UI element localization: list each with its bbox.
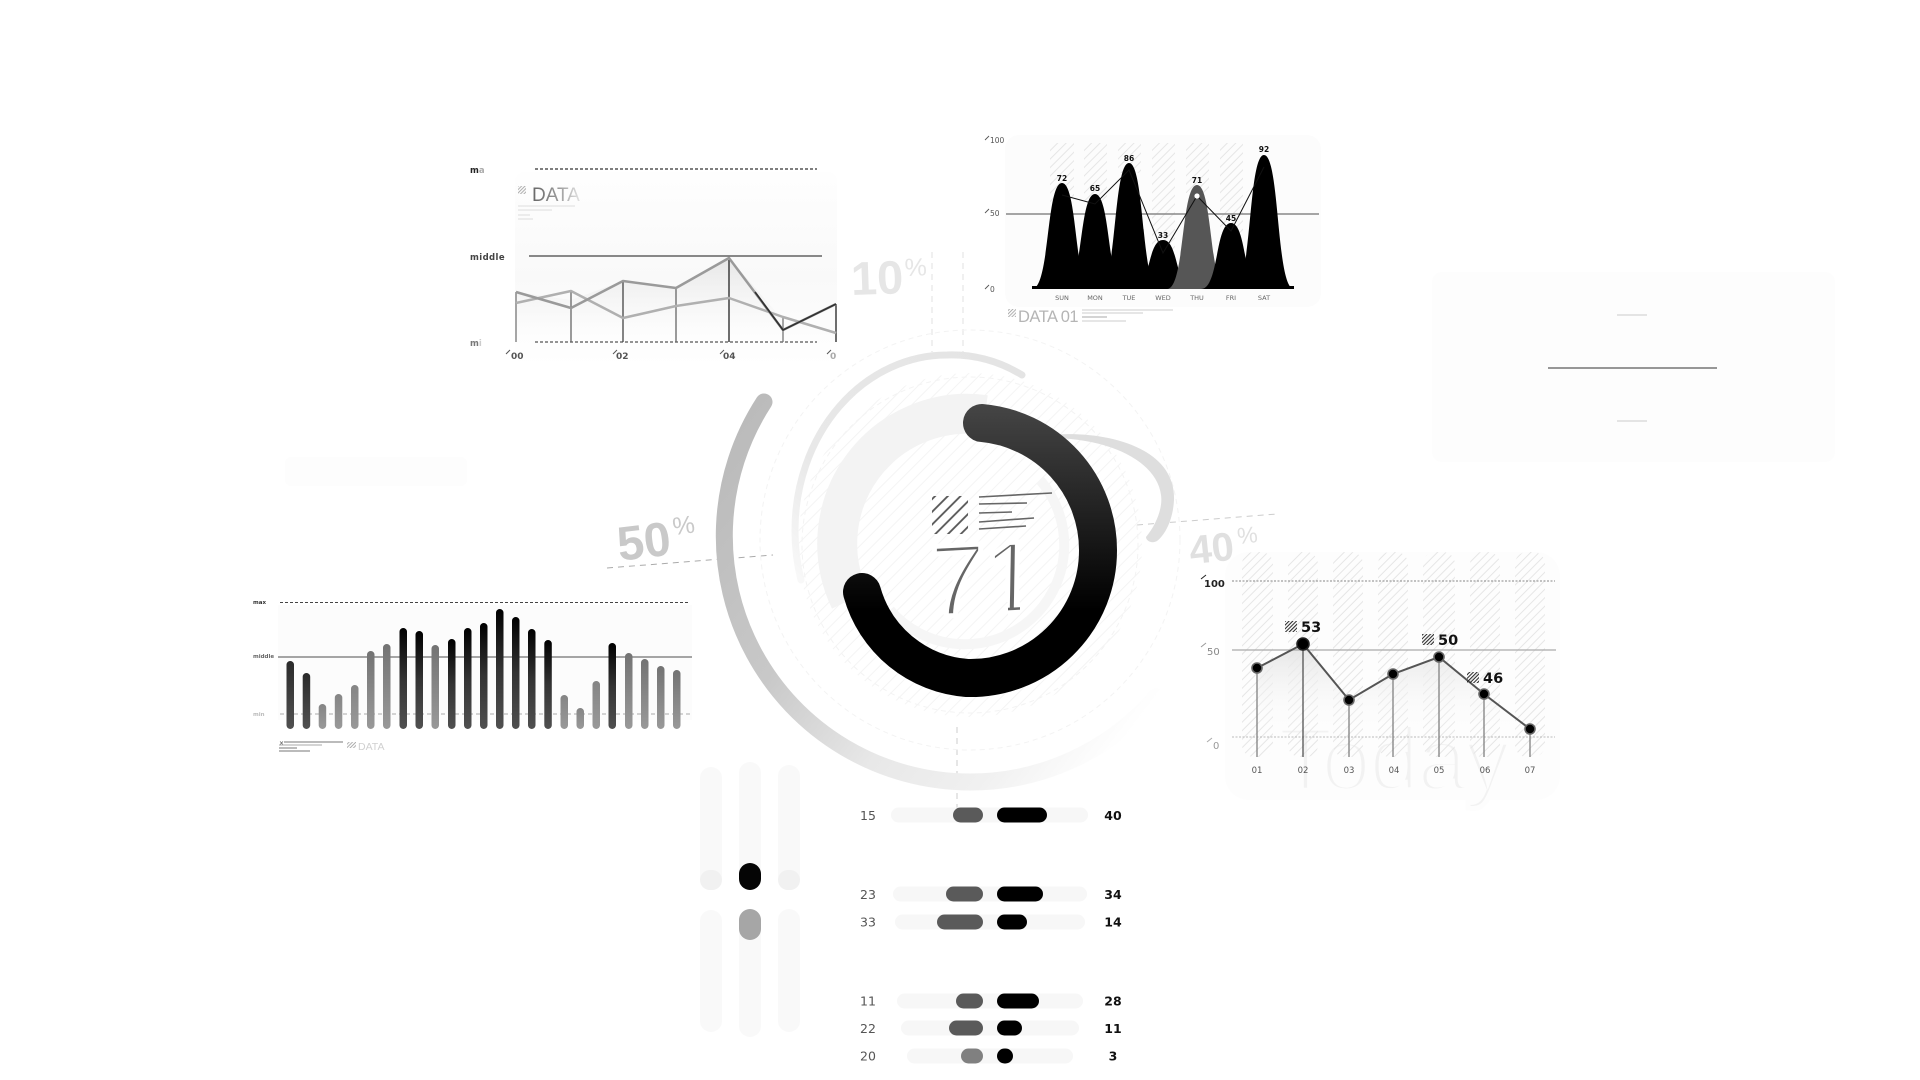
day labels <box>1055 294 1270 302</box>
x labels: 07 <box>1525 766 1535 776</box>
right numbers: 3 <box>1109 1048 1117 1064</box>
value labels: 72 <box>1057 174 1067 183</box>
caption: DATA 01 <box>1018 308 1078 326</box>
axis labels: 100 <box>1204 579 1225 590</box>
chart area fill <box>516 258 836 342</box>
panel: point chart right <box>1201 552 1560 810</box>
area fill <box>1257 644 1530 737</box>
panel: faint left placeholder <box>285 457 467 486</box>
axis labels <box>1204 579 1225 752</box>
left numbers: 20 <box>860 1048 876 1064</box>
second arc <box>795 355 1022 580</box>
day labels: THU <box>1189 294 1204 302</box>
caption <box>1008 308 1173 326</box>
axis labels: 0 <box>1213 741 1219 752</box>
guide dashes <box>607 252 1277 808</box>
data line <box>1257 644 1530 729</box>
right numbers: 11 <box>1104 1021 1122 1036</box>
value labels: 65 <box>1090 184 1100 193</box>
axis labels: middle <box>253 654 274 660</box>
label: 40 percent <box>1187 521 1261 573</box>
x labels: 0 <box>830 352 836 362</box>
label: 50 percent: % <box>671 511 696 541</box>
x labels: 00 <box>511 352 524 362</box>
value labels: 45 <box>1226 214 1236 223</box>
value labels <box>1057 145 1269 240</box>
value callouts: 53 <box>1301 620 1321 636</box>
ghost word: Today <box>1278 710 1510 810</box>
value labels: 71 <box>1192 176 1202 185</box>
day labels: SUN <box>1055 294 1069 302</box>
day labels: FRI <box>1226 294 1236 302</box>
right values <box>997 808 1047 1064</box>
donut gauge group <box>724 330 1180 782</box>
panel: faint right placeholder <box>1432 272 1835 462</box>
value labels: 92 <box>1259 145 1269 154</box>
panel: line chart top left <box>470 166 837 365</box>
ghost inner ring <box>890 480 1064 644</box>
centre icon hatch <box>932 496 968 534</box>
value labels: 86 <box>1124 154 1134 163</box>
day labels: TUE <box>1122 294 1135 302</box>
panel: bar chart left <box>253 600 692 753</box>
x labels: 02 <box>616 352 629 362</box>
label: 40 percent: 40 <box>1187 525 1236 573</box>
value callouts: 50 <box>1438 633 1458 649</box>
x labels <box>511 352 836 362</box>
marker <box>1194 193 1200 199</box>
x labels: 05 <box>1434 766 1444 776</box>
left numbers: 22 <box>860 1021 876 1036</box>
right numbers: 14 <box>1104 914 1122 930</box>
axis labels: 50 <box>990 209 1000 218</box>
x labels <box>1252 766 1535 776</box>
value callouts: 46 <box>1483 671 1503 687</box>
axis labels <box>470 166 505 349</box>
panel: diverging bars <box>860 808 1122 1064</box>
series A <box>516 258 836 330</box>
hatch columns <box>1242 552 1545 757</box>
series A dark segment <box>755 292 836 330</box>
axis labels: middle <box>470 253 505 263</box>
swoosh arc <box>1040 434 1174 542</box>
label: 50 percent: 50 <box>614 513 674 572</box>
bump Friday <box>1201 223 1261 289</box>
axis labels: ma <box>470 166 485 176</box>
bumps <box>1032 155 1294 289</box>
left numbers: 15 <box>860 808 876 823</box>
centre value: 71 <box>928 519 1037 639</box>
x labels: 04 <box>723 352 736 362</box>
panel: bell chart top centre <box>985 135 1321 326</box>
axis labels: 100 <box>990 136 1005 145</box>
hatch columns <box>1050 143 1243 253</box>
axis labels <box>253 600 274 718</box>
label: 10 percent <box>850 249 928 305</box>
legend: × <box>279 740 284 747</box>
highlighted bump Thursday <box>1167 185 1227 289</box>
hatched disc <box>798 373 1142 717</box>
value callouts <box>1285 620 1503 687</box>
data caption <box>518 185 580 219</box>
label: 40 percent: % <box>1236 521 1259 549</box>
drop lines <box>516 260 836 342</box>
axis labels: min <box>253 712 265 718</box>
x labels: 03 <box>1344 766 1354 776</box>
day labels: SAT <box>1258 294 1270 302</box>
axis labels: mi <box>470 339 482 349</box>
left numbers <box>860 808 876 1064</box>
connecting line <box>1062 167 1264 253</box>
left values <box>937 808 983 1064</box>
legend <box>279 740 384 753</box>
axis labels: 0 <box>990 285 995 294</box>
data points <box>1252 638 1535 734</box>
label: 50 percent <box>614 510 699 572</box>
day labels: MON <box>1087 294 1103 302</box>
outer arc <box>724 402 1156 782</box>
left numbers: 23 <box>860 887 876 902</box>
axis labels: max <box>253 600 266 606</box>
x labels: 01 <box>1252 766 1262 776</box>
value labels: 33 <box>1158 231 1168 240</box>
black pill <box>739 863 761 890</box>
data caption: DATA <box>532 185 580 206</box>
centre icon lines <box>979 493 1052 529</box>
grey pill <box>739 909 761 940</box>
right numbers: 28 <box>1104 994 1122 1008</box>
left numbers: 33 <box>860 914 876 930</box>
main ring <box>862 423 1098 678</box>
x labels: 04 <box>1389 766 1399 776</box>
right numbers <box>1104 808 1122 1064</box>
faint dashed orbit circles <box>760 330 1180 750</box>
x labels: 02 <box>1298 766 1308 776</box>
bars <box>286 609 680 729</box>
label: 10 percent: % <box>904 253 927 282</box>
right numbers: 40 <box>1104 808 1122 823</box>
x labels: 06 <box>1480 766 1490 776</box>
series B <box>516 291 836 333</box>
panel: vertical pills <box>700 762 800 1037</box>
legend: DATA <box>358 741 384 753</box>
label: 10 percent: 10 <box>850 250 904 305</box>
tracks <box>891 808 1088 1064</box>
left numbers: 11 <box>860 994 876 1008</box>
ghost ring <box>837 414 985 600</box>
drop lines <box>1257 644 1530 757</box>
axis labels: 50 <box>1207 647 1220 658</box>
right numbers: 34 <box>1104 887 1122 902</box>
axis labels <box>990 136 1005 294</box>
day labels: WED <box>1155 294 1171 302</box>
